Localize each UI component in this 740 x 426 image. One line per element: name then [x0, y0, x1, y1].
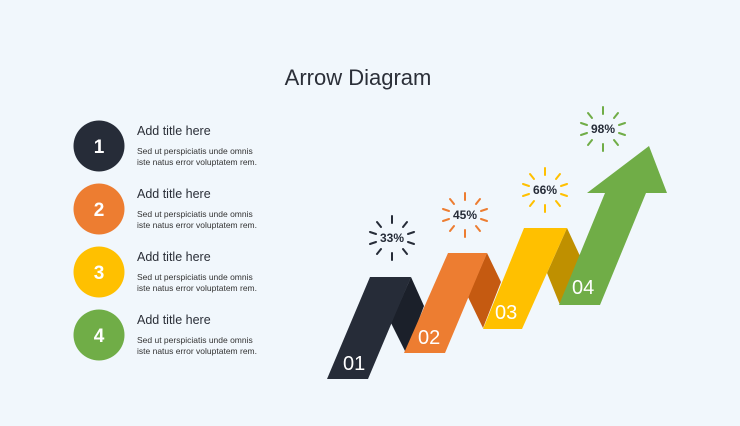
arrow diagram [327, 146, 667, 379]
list item 4: Sed ut perspiciatis unde omnis [137, 335, 253, 345]
step 02: 02 [418, 327, 440, 349]
list item 2 [74, 184, 257, 234]
list item 1: Sed ut perspiciatis unde omnis [137, 146, 253, 156]
step 01: 01 [343, 353, 365, 375]
burst 98%: 98% [591, 122, 615, 136]
step 02 [404, 253, 501, 353]
list item 1: Add title here [137, 124, 211, 138]
step 04 arrow [559, 146, 667, 305]
list item 2: 2 [94, 200, 104, 221]
burst 98% [581, 107, 625, 151]
burst 45%: 45% [453, 208, 477, 222]
list item 3: Add title here [137, 250, 211, 264]
burst 33% [370, 216, 414, 260]
title: Arrow Diagram [285, 65, 431, 90]
list item 2: Sed ut perspiciatis unde omnis [137, 209, 253, 219]
list item 1: 1 [94, 137, 105, 158]
list item 4 [74, 310, 257, 360]
list item 1 [74, 120, 257, 172]
list item 2: iste natus error voluptatem rem. [137, 220, 257, 230]
burst 66% [523, 168, 567, 212]
list item 3: iste natus error voluptatem rem. [137, 283, 257, 293]
list item 2: Add title here [137, 187, 211, 201]
burst 66%: 66% [533, 183, 557, 197]
list item 1: iste natus error voluptatem rem. [137, 157, 257, 167]
burst 33%: 33% [380, 231, 404, 245]
step 01 [327, 277, 424, 379]
list item 3 [74, 246, 257, 298]
list item 3: 3 [94, 263, 104, 284]
list item 3: Sed ut perspiciatis unde omnis [137, 272, 253, 282]
burst 45% [443, 193, 487, 237]
step 04 arrow: 04 [572, 277, 594, 299]
step 03: 03 [495, 302, 517, 324]
step 03 [483, 228, 580, 329]
list item 4: iste natus error voluptatem rem. [137, 346, 257, 356]
list item 4: 4 [94, 326, 105, 347]
list item 4: Add title here [137, 313, 211, 327]
